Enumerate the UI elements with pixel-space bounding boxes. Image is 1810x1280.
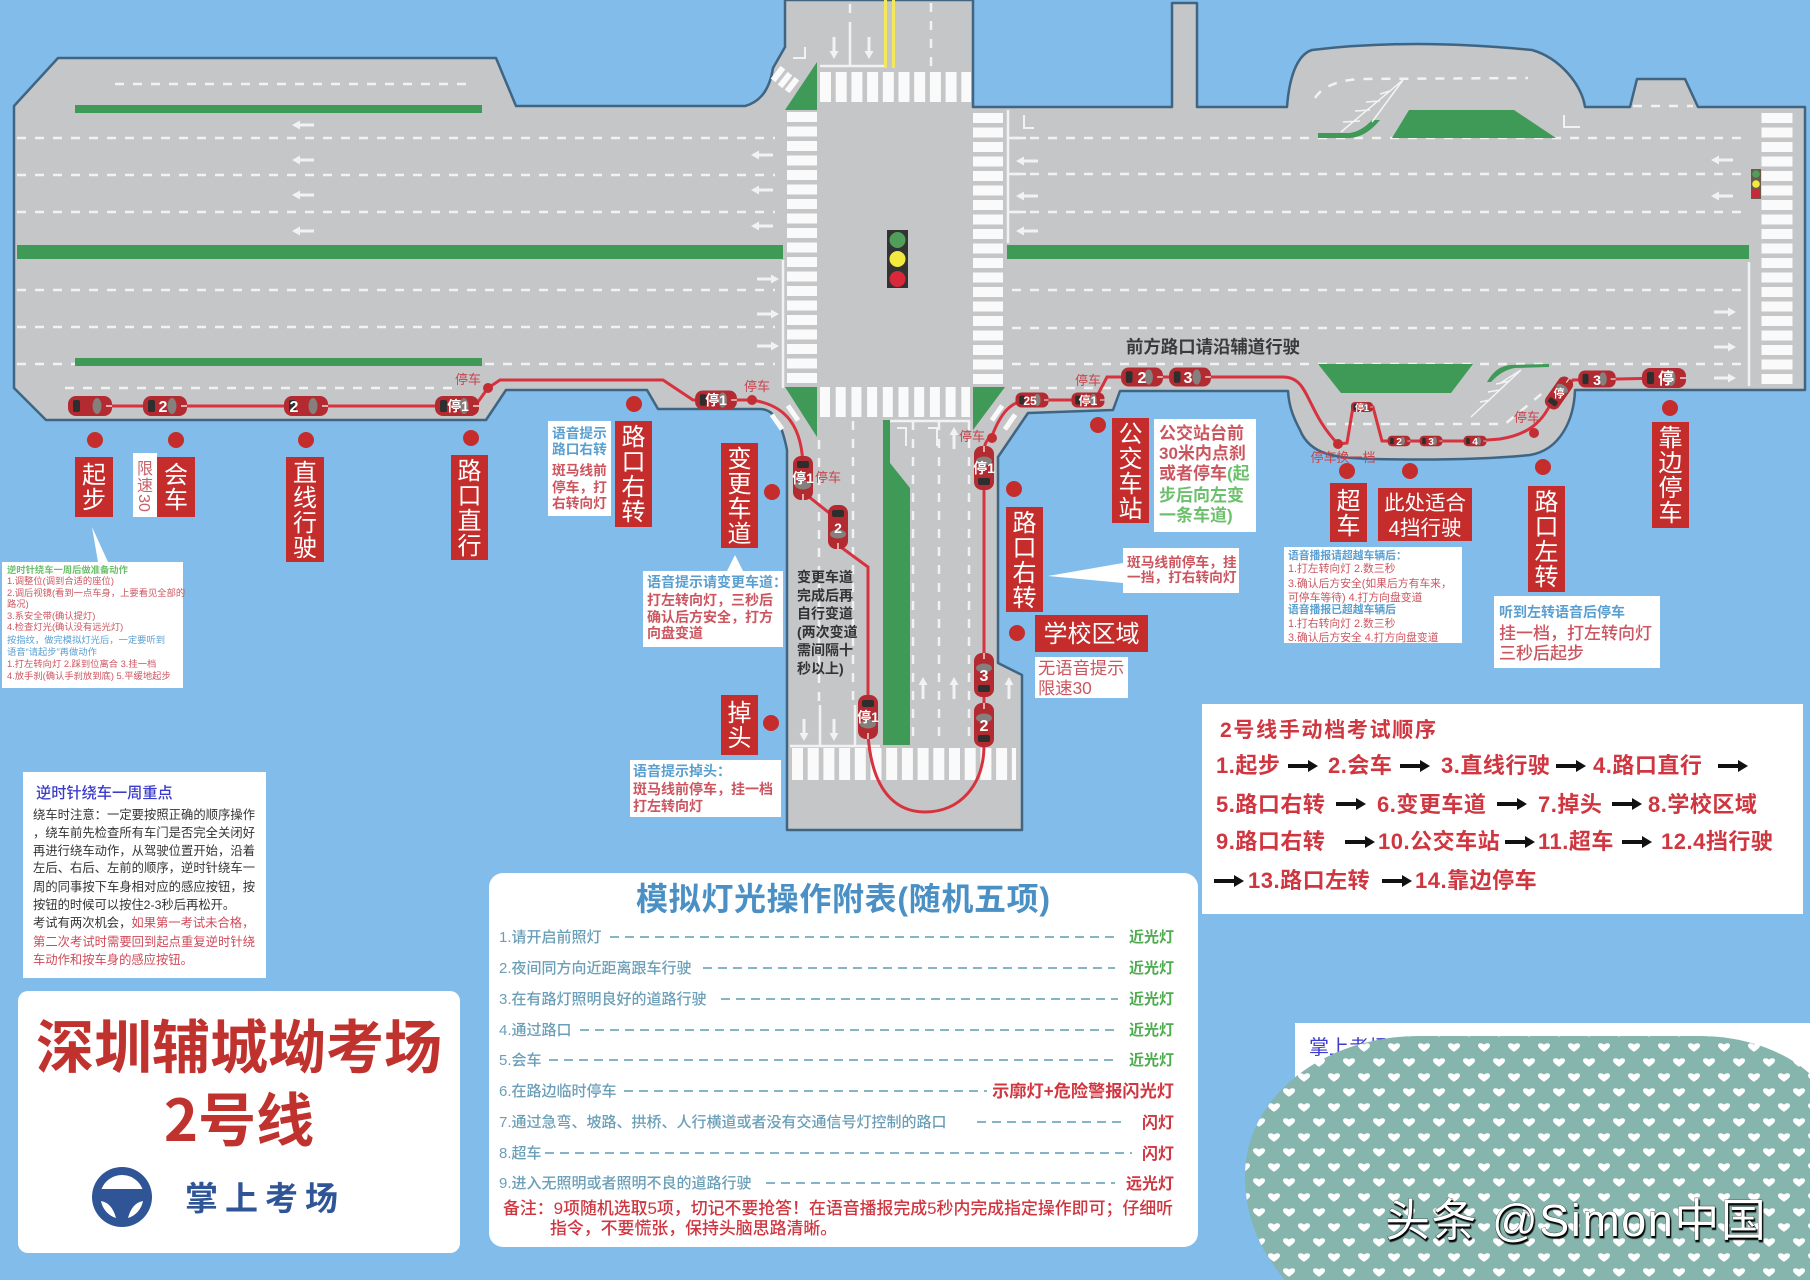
panel body: 绕车时注意：一定要按照正确的顺序操作 bbox=[33, 807, 255, 822]
callout: U-turn prompt: 语音提示掉头： bbox=[633, 763, 731, 779]
lane change note: 变更车道 bbox=[797, 569, 853, 585]
row 6: 6.在路边临时停车 bbox=[499, 1083, 617, 1100]
label: 此处适合4挡行驶: 此处适合 bbox=[1384, 492, 1466, 515]
label: 变更车道: 变 bbox=[728, 446, 752, 473]
label: 超车 bbox=[1330, 483, 1367, 542]
callout: overtaking: 可停车等待) 4.打方向盘变道 bbox=[1288, 590, 1423, 604]
road surface bbox=[14, 0, 1805, 830]
callout: U-turn prompt bbox=[630, 760, 781, 817]
brand name: 掌上考场 bbox=[185, 1180, 345, 1217]
panel: exam order bbox=[1202, 704, 1803, 914]
order step row 3: 10.公交车站 bbox=[1378, 829, 1500, 854]
callout: bus stop: 公交站台前 bbox=[1159, 423, 1244, 443]
panel: counterclockwise walk-around bbox=[23, 772, 266, 978]
crosswalks bbox=[792, 87, 1777, 764]
label: 学校区域: 学校区域 bbox=[1044, 621, 1140, 648]
order step row 2: 8.学校区域 bbox=[1648, 792, 1757, 817]
route number: 2号线 bbox=[164, 1074, 314, 1158]
stop lines bbox=[783, 22, 1749, 746]
road map bbox=[14, 0, 1805, 830]
label: 会车: 车 bbox=[164, 487, 188, 514]
callout: right turn at crosswalk: 一挡，打右转向灯 bbox=[1127, 569, 1237, 585]
label: 路口右转 (2): 转 bbox=[1012, 585, 1036, 612]
lane change note: (两次变道 bbox=[797, 624, 858, 640]
row 6: 示廓灯+危险警报闪光灯 bbox=[992, 1081, 1174, 1101]
callout: start procedure: 1.调整位(调到合适的座位) bbox=[7, 575, 114, 586]
corner crosswalk stripes bbox=[770, 66, 1017, 431]
label: 超车: 车 bbox=[1336, 513, 1360, 540]
label: 路口右转 (2): 右 bbox=[1012, 560, 1036, 587]
order step row 3 bbox=[1216, 829, 1773, 854]
callout: start procedure: 按指纹，做完模拟灯光后，一定要听到 bbox=[7, 634, 165, 645]
label: 路口右转: 右 bbox=[622, 474, 646, 501]
row 9: 9.进入无照明或者照明不良的道路行驶 bbox=[499, 1174, 752, 1192]
car: 掉头停1 bbox=[857, 695, 879, 739]
label: 路口左转: 路 bbox=[1534, 489, 1558, 516]
callout: start procedure: 路况) bbox=[7, 598, 29, 609]
callout: right turn voice prompt: 停车，打 bbox=[552, 479, 607, 495]
row 2: 2.夜间同方向近距离跟车行驶 bbox=[499, 959, 692, 977]
label: 路口右转: 转 bbox=[622, 499, 646, 526]
row 6 bbox=[499, 1081, 1174, 1101]
row 7: 7.通过急弯、坡路、拱桥、人行横道或者没有交通信号灯控制的路口 bbox=[499, 1113, 947, 1131]
callout: start procedure: 4.放手刹(确认手刹放到底) 5.平缓地起步 bbox=[7, 670, 171, 681]
label: 超车: 超 bbox=[1336, 488, 1360, 515]
car: 直线行驶 bbox=[284, 396, 328, 416]
label: 限速30: 限 bbox=[137, 460, 153, 478]
label: 靠边停车: 车 bbox=[1658, 500, 1682, 527]
label: 此处适合4挡行驶 bbox=[1378, 488, 1472, 541]
callout: start procedure: 逆时针绕车一周后做准备动作 bbox=[7, 564, 129, 575]
label: 变更车道 bbox=[721, 443, 758, 548]
traffic light: small bbox=[1751, 169, 1761, 199]
car: 起步 bbox=[68, 396, 112, 416]
panel body: 再进行绕车动作，从驾驶位置开始，沿着 bbox=[33, 843, 255, 858]
callout: right turn at crosswalk: 斑马线前停车，挂 bbox=[1127, 554, 1237, 570]
car: 公交3 bbox=[1169, 368, 1211, 387]
order heading: 2号线手动档考试顺序 bbox=[1220, 719, 1436, 742]
row 7: 闪灯 bbox=[1142, 1114, 1174, 1132]
row 2: 近光灯 bbox=[1129, 960, 1174, 977]
green medians bbox=[17, 62, 1749, 745]
label: 掉头 bbox=[721, 695, 758, 755]
car: 变更车道2 bbox=[828, 505, 848, 549]
callout: overtaking: 3.确认后方安全(如果后方有车来， bbox=[1288, 576, 1452, 590]
callout: U-turn prompt: 斑马线前停车，挂一档 bbox=[633, 781, 773, 797]
row 3: 3.在有路灯照明良好的道路行驶 bbox=[499, 990, 707, 1008]
callout: right turn voice prompt bbox=[548, 421, 611, 516]
lane change note: 完成后再 bbox=[797, 587, 853, 603]
label: 变更车道: 车 bbox=[728, 496, 752, 523]
stop labels: 停车 bbox=[1075, 373, 1101, 388]
label: 靠边停车: 靠 bbox=[1658, 425, 1682, 452]
label: 起步: 步 bbox=[82, 487, 106, 514]
car: 路口右转2: 停1 bbox=[973, 460, 995, 476]
car: 靠边停: 停 bbox=[1658, 369, 1674, 388]
panel: title bbox=[18, 991, 460, 1253]
label: 公交车站: 车 bbox=[1118, 471, 1142, 498]
callout: school zone: 限速30 bbox=[1038, 678, 1092, 698]
row 2 bbox=[499, 959, 1174, 977]
row 9 bbox=[499, 1174, 1174, 1193]
label: 路口右转 (2) bbox=[1006, 507, 1043, 612]
label: 限速30: 速 bbox=[137, 477, 153, 495]
label: 掉头: 掉 bbox=[728, 700, 752, 727]
row 8 bbox=[499, 1145, 1174, 1163]
lane markings bbox=[17, 3, 1749, 745]
lane change note: 自行变道 bbox=[797, 606, 853, 622]
label: 会车 bbox=[157, 457, 195, 517]
table heading: 模拟灯光操作附表(随机五项) bbox=[636, 881, 1050, 917]
car: 靠边3: 3 bbox=[1593, 372, 1601, 388]
callout: U-turn prompt: 打左转向灯 bbox=[633, 798, 703, 814]
order step row 1: 1.起步 bbox=[1216, 753, 1280, 778]
car: 公交停1 bbox=[1072, 392, 1104, 408]
order step row 1 bbox=[1216, 753, 1702, 778]
stop labels: 停车 bbox=[815, 470, 841, 485]
car: 变更车道停1 bbox=[792, 456, 814, 500]
car: 靠边停 bbox=[1642, 368, 1686, 388]
label: 路口左转: 转 bbox=[1534, 564, 1558, 591]
panel: light simulation table bbox=[489, 873, 1198, 1247]
order step row 4: 13.路口左转 bbox=[1248, 868, 1370, 893]
callout: start procedure: 3.系安全带(确认提灯) bbox=[7, 610, 95, 621]
car: 公交2: 2 bbox=[1138, 370, 1147, 387]
car: 路口左转停: 停 bbox=[1554, 386, 1564, 400]
callout: left turn: 听到左转语音后停车 bbox=[1499, 604, 1625, 620]
order step row 4 bbox=[1248, 868, 1537, 893]
car: 会车 bbox=[143, 396, 187, 416]
row 5: 近光灯 bbox=[1129, 1052, 1174, 1069]
stage markers bbox=[87, 396, 1678, 731]
traffic light: main bbox=[887, 230, 908, 288]
stop labels: 停车换一档 bbox=[1310, 450, 1376, 465]
row 3 bbox=[499, 990, 1174, 1008]
callout: start procedure: 4.检查灯光(确认没有远光灯) bbox=[7, 621, 123, 632]
partially hidden label: 掌上考场 bbox=[1309, 1036, 1389, 1059]
lane change note: 秒以上) bbox=[797, 660, 844, 676]
callout: lane change prompt: 语音提示请变更车道： bbox=[647, 574, 787, 590]
car: 学校区域3 bbox=[974, 653, 994, 697]
callout: start procedure: 2.调后视镜(看到一点车身，上要看见全部的 bbox=[7, 587, 185, 598]
callout: lane change prompt bbox=[643, 555, 787, 647]
label: 变更车道: 道 bbox=[728, 521, 752, 548]
row 1 bbox=[499, 929, 1174, 946]
label: 限速30: 30 bbox=[135, 494, 152, 512]
label: 直线行驶: 直 bbox=[293, 460, 317, 487]
label: 公交车站: 交 bbox=[1118, 446, 1142, 473]
order step row 1: 2.会车 bbox=[1328, 753, 1392, 778]
label: 会车: 会 bbox=[164, 462, 188, 489]
label: 直线行驶: 线 bbox=[293, 485, 317, 512]
arrow row 4 bbox=[1214, 875, 1412, 887]
label: 直线行驶: 驶 bbox=[293, 535, 317, 562]
panel body: 按钮的时候可以按住2-3秒后再松开。 bbox=[33, 897, 235, 912]
label: 路口直行: 直 bbox=[458, 508, 482, 535]
row 1: 1.请开启前照灯 bbox=[499, 929, 602, 946]
car: 路口右转停1 bbox=[695, 390, 737, 410]
order step row 4: 14.靠边停车 bbox=[1415, 868, 1537, 893]
label: 路口右转: 口 bbox=[622, 449, 646, 476]
arrow row 1 bbox=[1288, 760, 1748, 772]
main title: 深圳辅城坳考场 bbox=[36, 1001, 442, 1085]
callout: right turn at crosswalk bbox=[1048, 548, 1239, 593]
stop labels: 停车 bbox=[744, 379, 770, 394]
order step row 2 bbox=[1216, 792, 1757, 817]
callout: bus stop: 或者停车(起 bbox=[1159, 464, 1250, 483]
panel body: 考试有两次机会，如果第一考试未合格， bbox=[33, 915, 254, 930]
hatched islands bbox=[1341, 80, 1521, 417]
bottom-right panel bbox=[1245, 1023, 1810, 1280]
stop labels: 停车 bbox=[455, 372, 481, 387]
callout: start procedure: 语音“请起步”再做动作 bbox=[7, 646, 97, 657]
label: 路口右转: 路 bbox=[622, 424, 646, 451]
double yellow line bbox=[886, 0, 894, 68]
label: 公交车站: 站 bbox=[1118, 496, 1142, 523]
panel body: ，绕车前先检查所有车门是否完全关闭好 bbox=[33, 825, 255, 840]
callout: left turn: 三秒后起步 bbox=[1499, 644, 1584, 663]
callout: left turn bbox=[1494, 596, 1660, 668]
callout: right turn voice prompt: 语音提示 bbox=[552, 425, 607, 441]
row 5: 5.会车 bbox=[499, 1052, 542, 1069]
panel body: 车动作和按车身的感应按钮。 bbox=[33, 952, 193, 967]
car: 公交25 bbox=[1016, 392, 1048, 408]
row 8: 闪灯 bbox=[1142, 1145, 1174, 1163]
label: 路口右转 (2): 口 bbox=[1012, 535, 1036, 562]
car: 会车: 2 bbox=[159, 399, 168, 416]
route line bbox=[90, 377, 1664, 812]
label: 此处适合4挡行驶: 4挡行驶 bbox=[1389, 517, 1461, 540]
callout: lane change prompt: 确认后方安全，打方 bbox=[647, 609, 773, 625]
sign text: follow side road: 前方路口请沿辅道行驶 bbox=[1126, 337, 1300, 357]
car: 学校区域2 bbox=[974, 703, 994, 747]
car: 公交2 bbox=[1121, 368, 1163, 387]
car: 超车停1 bbox=[1351, 402, 1373, 413]
car: 路口直行 bbox=[435, 396, 479, 416]
car: 超车4 bbox=[1464, 436, 1486, 448]
label: 公交车站: 公 bbox=[1118, 421, 1142, 448]
callout: school zone: 无语音提示 bbox=[1038, 658, 1124, 678]
label: 起步: 起 bbox=[82, 462, 106, 489]
row 8: 8.超车 bbox=[499, 1145, 542, 1162]
panel body: 周的同事按下车身相对应的感应按钮，按 bbox=[33, 879, 255, 894]
table note: 备注：9项随机选取5项，切记不要抢答！在语音播报完成5秒内完成指定操作即可；仔细听 bbox=[503, 1198, 1173, 1218]
car: 靠边3 bbox=[1578, 370, 1616, 388]
car: 公交停1: 停1 bbox=[1079, 393, 1098, 408]
panel heading: 逆时针绕车一周重点 bbox=[36, 784, 173, 802]
callout: overtaking: 3.确认后方安全 4.打方向盘变道 bbox=[1288, 630, 1439, 644]
row 4: 近光灯 bbox=[1129, 1022, 1174, 1039]
row 9: 远光灯 bbox=[1126, 1175, 1174, 1193]
car: 路口直行: 停1 bbox=[447, 398, 469, 414]
callout: bus stop bbox=[1154, 419, 1256, 532]
car: 公交25: 25 bbox=[1023, 394, 1037, 408]
label: 起步 bbox=[75, 457, 113, 517]
callout: right turn voice prompt: 右转向灯 bbox=[552, 495, 607, 511]
label: 直线行驶 bbox=[286, 457, 324, 562]
car: 超车停1: 停1 bbox=[1355, 402, 1369, 413]
row 7 bbox=[499, 1113, 1174, 1132]
row 4: 4.通过路口 bbox=[499, 1022, 572, 1039]
car: 路口右转2 bbox=[973, 446, 995, 490]
label: 路口左转 bbox=[1528, 486, 1565, 592]
order step row 1: 3.直线行驶 bbox=[1441, 753, 1550, 778]
panel body bbox=[33, 807, 255, 967]
label: 掉头: 头 bbox=[728, 725, 752, 752]
car: 超车3 bbox=[1420, 436, 1442, 448]
watermark: 头条 @Simon中国 bbox=[1385, 1195, 1767, 1246]
callout: school zone bbox=[1035, 657, 1128, 698]
car: 超车2 bbox=[1388, 436, 1410, 448]
order step row 2: 6.变更车道 bbox=[1377, 792, 1486, 817]
route stop dots bbox=[483, 383, 1539, 449]
callout: overtaking: 1.打左转向灯 2.数三秒 bbox=[1288, 561, 1396, 575]
label: 路口左转: 左 bbox=[1534, 539, 1558, 566]
car: 变更车道2: 2 bbox=[834, 520, 842, 536]
car: 变更车道停1: 停1 bbox=[792, 470, 814, 486]
order step row 3: 9.路口右转 bbox=[1216, 829, 1325, 854]
label: 路口右转 bbox=[615, 421, 652, 527]
callout: overtaking: 语音播报请超越车辆后： bbox=[1288, 548, 1407, 562]
label: 公交车站 bbox=[1112, 418, 1149, 523]
label: 路口直行 bbox=[451, 455, 488, 560]
callout: left turn: 挂一档，打左转向灯 bbox=[1499, 624, 1652, 643]
label: 变更车道: 更 bbox=[728, 471, 752, 498]
car: 学校区域3: 3 bbox=[980, 668, 989, 685]
stop labels: 停车 bbox=[959, 429, 985, 444]
callout: overtaking: 语音播报已超越车辆后 bbox=[1288, 602, 1396, 616]
car: 掉头停1: 停1 bbox=[857, 709, 879, 725]
order step row 1: 4.路口直行 bbox=[1593, 753, 1702, 778]
car: 路口右转停1: 停1 bbox=[705, 392, 727, 408]
callout: lane change prompt: 打左转向灯，三秒后 bbox=[647, 592, 773, 608]
arrow row 2 bbox=[1336, 798, 1642, 810]
label: 靠边停车 bbox=[1652, 422, 1689, 528]
car: 公交3: 3 bbox=[1184, 370, 1193, 387]
row 4 bbox=[499, 1022, 1174, 1039]
callout: start procedure bbox=[2, 527, 188, 688]
stop labels: 停车 bbox=[1514, 410, 1540, 425]
row 1: 近光灯 bbox=[1129, 929, 1174, 946]
callout: start procedure: 1.打左转向灯 2.踩到位离合 3.挂一档 bbox=[7, 658, 156, 669]
panel body: 左后、右后、左前的顺序，逆时针绕车一 bbox=[33, 860, 255, 875]
callout: right turn voice prompt: 路口右转 bbox=[552, 441, 607, 457]
callout: overtaking: 1.打右转向灯 2.数三秒 bbox=[1288, 616, 1396, 630]
table note: 指令，不要慌张，保持头脑思路清晰。 bbox=[550, 1219, 837, 1238]
label: 路口直行: 行 bbox=[458, 533, 482, 560]
order step row 3: 11.超车 bbox=[1538, 829, 1614, 854]
row 3: 近光灯 bbox=[1129, 991, 1174, 1008]
label: 路口直行: 路 bbox=[458, 458, 482, 485]
callout: overtaking bbox=[1284, 547, 1462, 644]
car: 路口左转停 bbox=[1542, 374, 1576, 412]
icon: steering wheel bbox=[92, 1167, 152, 1227]
stop labels bbox=[455, 372, 1540, 485]
label: 路口右转 (2): 路 bbox=[1012, 510, 1036, 537]
label: 靠边停车: 边 bbox=[1658, 450, 1682, 477]
car: 直线行驶: 2 bbox=[290, 399, 299, 416]
car: 超车3: 3 bbox=[1428, 437, 1434, 448]
callout: bus stop: 步后向左变 bbox=[1159, 485, 1244, 505]
label: 路口直行: 口 bbox=[458, 483, 482, 510]
callout: right turn voice prompt: 斑马线前 bbox=[552, 462, 607, 478]
callout: bus stop: 30米内点刹 bbox=[1159, 444, 1246, 463]
label: 限速30 bbox=[133, 453, 157, 517]
car: 超车4: 4 bbox=[1472, 437, 1478, 448]
arrow row 3 bbox=[1345, 836, 1652, 848]
callout: bus stop: 一条车道) bbox=[1159, 505, 1233, 525]
car: 超车2: 2 bbox=[1396, 437, 1402, 448]
heart-pattern cover bbox=[1245, 1036, 1810, 1280]
lane change note: 需间隔十 bbox=[797, 642, 853, 658]
road arrows bbox=[292, 37, 1736, 741]
panel body: 第二次考试时需要回到起点重复逆时针绕 bbox=[33, 934, 255, 949]
label: 学校区域 bbox=[1035, 615, 1148, 652]
label: 直线行驶: 行 bbox=[293, 510, 317, 537]
label: 靠边停车: 停 bbox=[1658, 475, 1682, 502]
callout: lane change prompt: 向盘变道 bbox=[647, 625, 703, 641]
label: 路口左转: 口 bbox=[1534, 514, 1558, 541]
row 5 bbox=[499, 1052, 1174, 1069]
car: 学校区域2: 2 bbox=[980, 718, 989, 735]
order step row 3: 12.4挡行驶 bbox=[1661, 829, 1773, 854]
order step row 2: 7.掉头 bbox=[1538, 792, 1602, 817]
order step row 2: 5.路口右转 bbox=[1216, 792, 1325, 817]
